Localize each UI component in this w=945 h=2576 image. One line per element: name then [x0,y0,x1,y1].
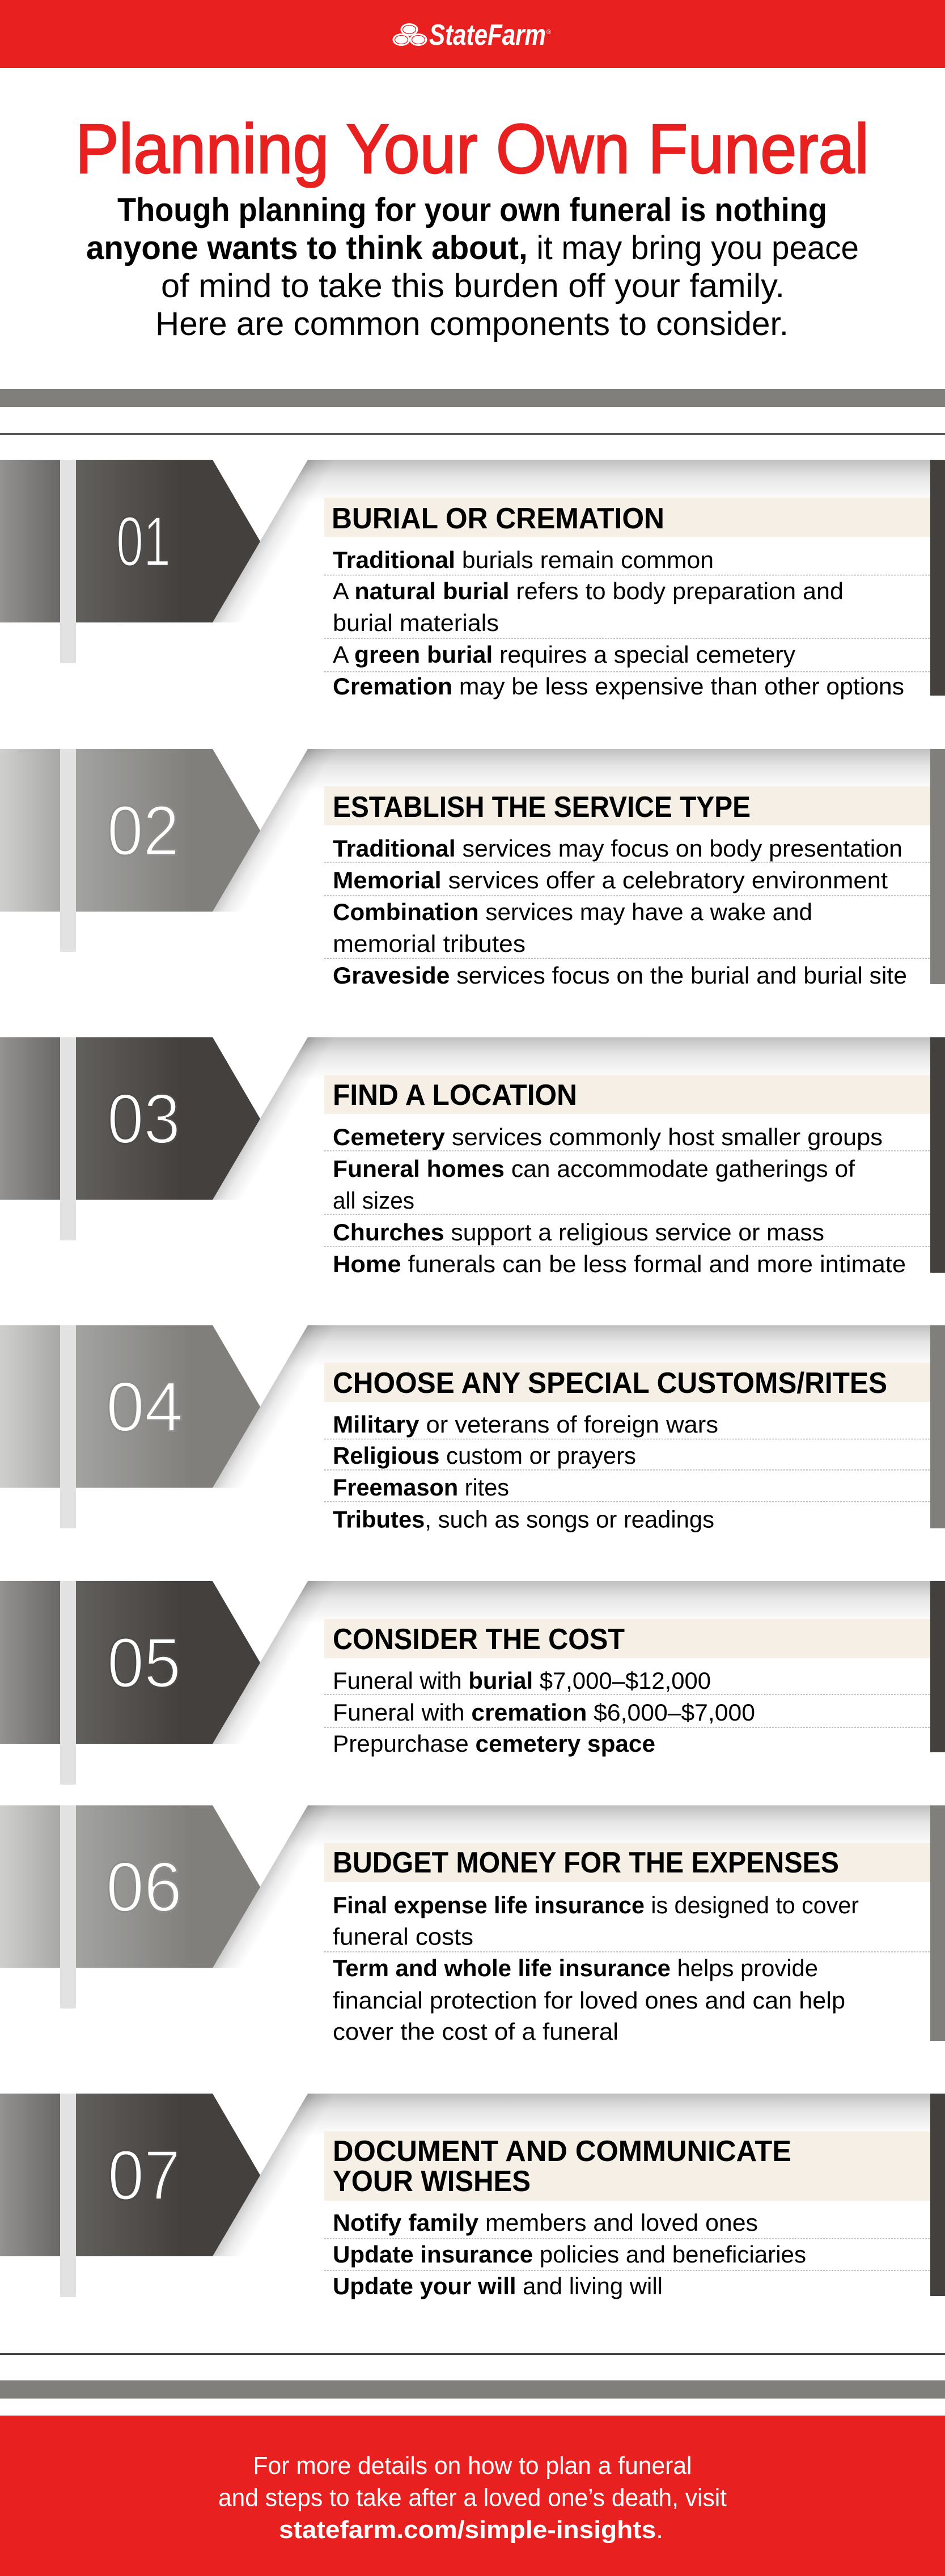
step 05 list [324,1667,930,1757]
step 03 list: Funeral homes can accommodate gatherings of [333,1155,855,1182]
step 03 list: Churches support a religious service or mass [333,1219,824,1245]
step 03 list: Home funerals can be less formal and more intimate [333,1251,906,1277]
footer text: For more details on how to plan a funeral [253,2452,692,2480]
step 04 [0,1325,945,1533]
step 07 list: Update insurance policies and beneficiaries [333,2241,806,2268]
step 04 list: Military or veterans of foreign wars [333,1411,718,1438]
intro text: Though planning for your own funeral is nothing [117,192,827,228]
step 06 [0,1805,945,2045]
step 01 [0,460,945,700]
step 03 number tab [0,1037,945,1273]
title: Planning Your Own Funeral [75,111,869,188]
step 04 list: Freemason rites [333,1474,509,1501]
step 02 list [324,835,930,989]
step 05 heading [324,1619,930,1658]
step 01 number tab: 01 [116,503,171,581]
step 07 number tab: 07 [108,2137,180,2215]
logo: State Farm [392,19,551,52]
step 01 list [324,546,930,700]
step 03 number tab: 03 [107,1081,180,1159]
header band [0,0,945,68]
step 03 heading: FIND A LOCATION [333,1079,577,1112]
step 03 list: Cemetery services commonly host smaller groups [333,1124,883,1150]
intro text: Here are common components to consider. [155,306,789,342]
step 06 list [324,1892,930,2045]
logo: State Farm: ® [546,29,551,36]
step 01 list: Traditional burials remain common [333,546,714,573]
step 03 [0,1037,945,1277]
step 06 list: funeral costs [333,1923,473,1950]
step 04 heading: CHOOSE ANY SPECIAL CUSTOMS/RITES [333,1367,887,1400]
step 07 heading [324,2132,930,2201]
step 05 heading: CONSIDER THE COST [333,1623,625,1656]
step 06 list: cover the cost of a funeral [333,2018,618,2045]
intro text: of mind to take this burden off your family. [161,268,785,304]
intro text: anyone wants to think about, it may bring you peace [86,230,859,266]
step 07 list: Notify family members and loved ones [333,2209,758,2236]
step 01 number tab [0,460,945,696]
step 01 list: A green burial requires a special cemetery [333,641,795,668]
step 02 list: Combination services may have a wake and [333,899,812,925]
step 02 list: memorial tributes [333,930,526,957]
step 07 number tab [0,2094,945,2297]
step 05 number tab [0,1581,945,1785]
step 02 list: Traditional services may focus on body presentation [333,835,902,862]
step 03 list: all sizes [333,1187,414,1214]
step 01 heading: BURIAL OR CREMATION [332,502,664,535]
step 06 list: financial protection for loved ones and can help [333,1987,845,2014]
step 04 number tab: 04 [106,1368,183,1447]
step 05 list: Funeral with burial $7,000–$12,000 [333,1667,711,1694]
step 05 list: Funeral with cremation $6,000–$7,000 [333,1699,755,1726]
step 06 heading: BUDGET MONEY FOR THE EXPENSES [333,1846,839,1879]
step 02 heading: ESTABLISH THE SERVICE TYPE [333,791,751,824]
footer text: and steps to take after a loved one’s death, visit [218,2484,727,2511]
step 02 number tab: 02 [107,792,179,870]
step 07 list: Update your will and living will [333,2273,663,2299]
step 03 heading [324,1075,930,1114]
footer text: statefarm.com/simple-insights . [279,2516,663,2544]
step 04 number tab [0,1325,945,1528]
top gray bar [0,389,945,407]
step 03 list [324,1124,930,1277]
step 05 number tab: 05 [107,1624,181,1702]
step 02 list: Graveside services focus on the burial and burial site [333,962,907,989]
step 04 list: Religious custom or prayers [333,1442,636,1469]
footer text [218,2452,727,2544]
step 07 heading: YOUR WISHES [333,2165,531,2198]
step 05 [0,1581,945,1785]
step 06 list: Final expense life insurance is designed to cover [333,1892,859,1918]
step 06 number tab: 06 [106,1848,182,1926]
bottom gray bar [0,2353,945,2399]
step 02 [0,749,945,989]
step 01 list: A natural burial refers to body preparation and [333,578,844,604]
step 05 list: Prepurchase cemetery space [333,1730,655,1757]
step 07 heading: DOCUMENT AND COMMUNICATE [333,2135,791,2168]
step 02 heading [324,786,930,825]
step 01 heading [324,498,930,537]
step 07 [0,2094,945,2299]
step 02 list: Memorial services offer a celebratory environment [333,867,888,893]
step 07 list [324,2209,930,2299]
step 01 list: burial materials [333,609,499,636]
footer band [0,2416,945,2576]
intro text [86,192,859,342]
step 04 list [324,1411,930,1533]
logo: State Farm: StateFarm [429,19,546,52]
step 04 list: Tributes, such as songs or readings [333,1506,714,1533]
step 06 list: Term and whole life insurance helps provide [333,1955,818,1981]
step 02 number tab [0,749,945,984]
step 01 list: Cremation may be less expensive than other options [333,673,904,700]
step 06 number tab [0,1805,945,2041]
